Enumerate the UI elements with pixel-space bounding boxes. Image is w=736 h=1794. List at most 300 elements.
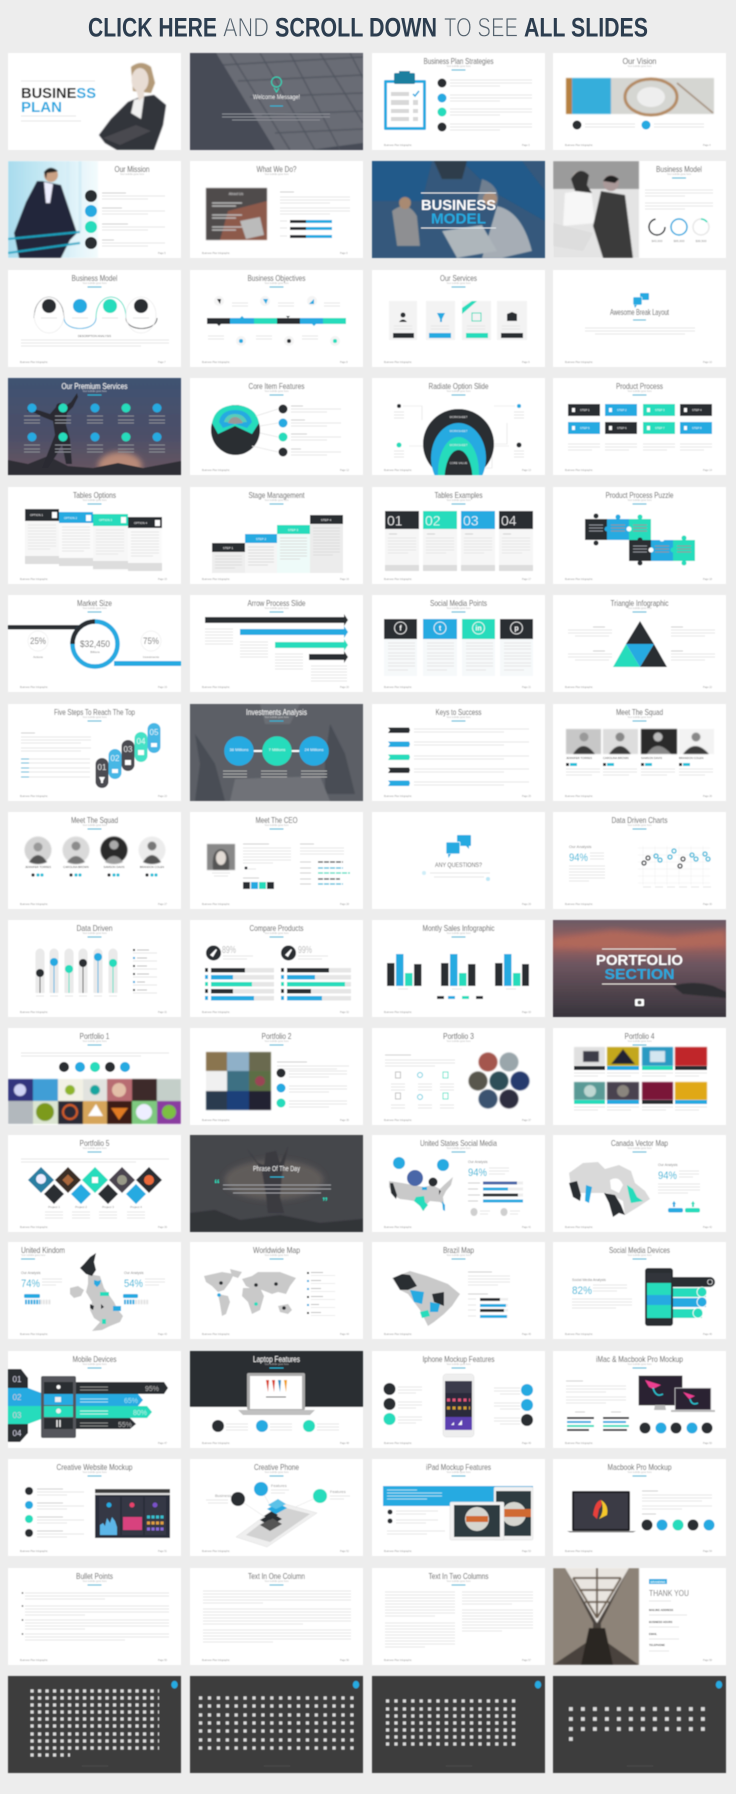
footer: Business Plan Infographic: [20, 1333, 48, 1336]
panel: slide 35 Montly Sales Infographic: [372, 920, 545, 1017]
footer: Business Plan Infographic: [202, 686, 230, 689]
social columns: f: [399, 626, 402, 632]
timeline icons: [214, 296, 340, 346]
footer: Business Plan Infographic: [20, 1226, 48, 1229]
connector lines: [403, 406, 515, 468]
footer: Business Plan Infographic: [384, 795, 412, 798]
stat: 74%: [21, 1271, 41, 1298]
heading: Your subtitle goes here: [264, 173, 289, 176]
badge: [535, 1681, 541, 1688]
feature bullets: [387, 1510, 445, 1534]
stat: 82%: Social Media Analysis: [572, 1278, 606, 1282]
panel: slide 1 cover Business Plan: [8, 53, 181, 151]
process arrows: [205, 614, 348, 663]
heading: Your subtitle goes here: [120, 173, 145, 176]
footer: [565, 469, 713, 472]
footer: [202, 469, 350, 472]
panel: slide 54 Creative Phone: [190, 1459, 363, 1556]
heading: Your subtitle goes here: [627, 716, 652, 719]
footer: Page 7: [158, 361, 166, 364]
footer: Page 10: [703, 361, 713, 364]
stat: 94%: Our Analysis: [468, 1160, 488, 1164]
stat: 25% Actions: [28, 631, 48, 659]
team details: [566, 756, 703, 766]
stat: 54%: Our Analysis: [124, 1271, 144, 1275]
small icons: [396, 1072, 448, 1100]
legend: [307, 1272, 335, 1316]
callout text: Features: [271, 1483, 287, 1488]
heading: Data Driven Charts: [612, 815, 668, 825]
footer: Business Plan Infographic: [20, 1011, 48, 1014]
title: CLICK HERE: [88, 12, 217, 42]
footer: Page 12: [340, 469, 350, 472]
concentric radiate chart: WORKSHEET: [449, 443, 468, 447]
photo: silhouette at sunset: [8, 393, 181, 480]
percent bars: 95%: [145, 1386, 159, 1393]
heading: Creative Phone: [254, 1462, 299, 1472]
heading: Our Mission: [114, 164, 150, 174]
heading: [422, 923, 494, 937]
footer: Page 31: [158, 1011, 168, 1014]
footer: Page 29: [522, 903, 532, 906]
footer: Page 42: [703, 1226, 713, 1229]
icon list: [25, 1487, 84, 1537]
step pills: [96, 723, 160, 788]
heading: Your subtitle goes here: [667, 173, 692, 176]
footer: [565, 686, 713, 689]
stat: 54%: [123, 1271, 144, 1298]
heading: [253, 1245, 300, 1259]
step tiles: STEP 6: [617, 426, 627, 430]
stat: 75% Investments: 75%: [143, 636, 159, 646]
photo grid: [206, 1052, 271, 1110]
footer: Business Plan Infographic: [20, 578, 48, 581]
footer: [20, 1226, 168, 1229]
panel: slide 14 Core Item Features: [190, 378, 363, 475]
footer: Business Plan Infographic: [565, 795, 593, 798]
footer: Business Plan Infographic: [20, 361, 48, 364]
investment circles: [224, 736, 329, 766]
stair steps: STEP 1: [223, 546, 233, 550]
footer: Page 22: [703, 686, 713, 689]
heading: [248, 381, 304, 395]
heading: [246, 707, 307, 721]
footer: Business Plan Infographic: [20, 903, 48, 906]
icons with text: [572, 120, 704, 130]
panel: slide 23 Social Media Points: [372, 595, 545, 692]
project labels: [45, 1205, 145, 1218]
option columns: [25, 509, 162, 571]
isometric phone: [236, 1489, 320, 1547]
percent bars: 65%: [124, 1398, 138, 1405]
step tiles: STEP 5: [580, 426, 590, 430]
step tiles: STEP 1: [580, 408, 590, 412]
bar chart: [387, 954, 529, 986]
footer: [565, 795, 713, 798]
footer: [384, 795, 532, 798]
team details: BRANDON COLEN: [140, 865, 164, 869]
step pills: 02: [111, 754, 120, 763]
heading: Social Media Devices: [609, 1245, 670, 1255]
heading: Arrow Process Slide: [248, 598, 306, 608]
panel: slide 20 Product Process Puzzle: [553, 487, 726, 584]
footer: Business Plan Infographic: [202, 469, 230, 472]
heading: [248, 598, 306, 612]
feature icons: [212, 1420, 339, 1432]
panel: slide 50 Laptop Features: [190, 1351, 363, 1448]
footer: Business Plan Infographic: [384, 578, 412, 581]
heading: Macbook Pro Mockup: [608, 1462, 672, 1472]
heading: Market Size: [77, 598, 112, 608]
footer: [384, 1226, 532, 1229]
heading: Your subtitle goes here: [82, 499, 107, 502]
stat: 54%: 54%: [124, 1278, 143, 1290]
horizontal bars: [468, 1182, 523, 1202]
heading: [21, 1245, 65, 1259]
heading: Product Process Puzzle: [606, 490, 674, 500]
icon grid: [569, 1709, 711, 1739]
heading: Your subtitle goes here: [264, 390, 289, 393]
heading: Your subtitle goes here: [82, 932, 107, 935]
stat: 94%: 94%: [658, 1170, 677, 1182]
footer: Page 9: [522, 361, 530, 364]
panel: slide 62 icons: [190, 1676, 363, 1773]
title: TO SEE: [444, 12, 518, 42]
heading: [80, 1138, 110, 1152]
heading: Canada Vector Map: [611, 1138, 668, 1148]
heading: Your subtitle goes here: [82, 1471, 107, 1474]
ring chart: [8, 622, 181, 666]
left features: [384, 1383, 422, 1425]
panel: slide 6 What We Do: [190, 161, 363, 258]
footer: Page 15: [158, 578, 168, 581]
heading: Your subtitle goes here: [264, 932, 289, 935]
panel: slide 58 Text In One Column: [190, 1568, 363, 1665]
map: world: [204, 1269, 296, 1316]
step tiles: STEP 8: [692, 426, 702, 430]
footer: Page 23: [158, 795, 168, 798]
numbered chevrons: 04: [13, 1429, 22, 1438]
heading: Your subtitle goes here: [264, 716, 289, 719]
heading: Social Media Points: [430, 598, 487, 608]
heading: [443, 1245, 474, 1259]
project labels: Project 3: [102, 1205, 114, 1209]
team details: SAMSON DAVIS: [641, 756, 662, 760]
step tiles: STEP 4: [692, 408, 702, 412]
panel: slide 53 Creative Website Mockup: [8, 1459, 181, 1556]
heading: Our Premium Services: [62, 381, 128, 391]
footer: [565, 1442, 713, 1445]
phone: [41, 1376, 76, 1438]
stat: 75% Investments: Investments: [143, 655, 160, 659]
stair steps: [212, 515, 343, 573]
two text columns: [385, 1592, 533, 1647]
stats: $65,000: [674, 239, 685, 243]
icon grid: [30, 1691, 159, 1755]
stat: 82%: [572, 1278, 606, 1297]
title: SCROLL DOWN: [275, 12, 437, 42]
footer: Business Plan Infographic: [565, 144, 593, 147]
icon: light bulb: [272, 77, 282, 92]
heading: [436, 707, 482, 721]
footer: Business Plan Infographic: [384, 1226, 412, 1229]
team portraits: [24, 836, 166, 864]
heading: [114, 164, 150, 176]
heading: Montly Sales Infographic: [422, 923, 494, 933]
heading: Your subtitle goes here: [82, 1147, 107, 1150]
footer: Page 45: [522, 1333, 532, 1336]
footer: [202, 1333, 350, 1336]
heading: Your subtitle goes here: [627, 390, 652, 393]
heading: [624, 1031, 655, 1045]
footer: [20, 903, 168, 906]
project labels: Project 1: [48, 1205, 60, 1209]
panel: slide 46 Worldwide Map: [190, 1242, 363, 1339]
laptop: [238, 1373, 315, 1415]
heading: Bullet Points: [76, 1571, 113, 1581]
bar chart: [280, 220, 332, 238]
panel: slide 48 Social Media Devices: [553, 1242, 726, 1339]
footer: Page 58: [703, 1659, 713, 1662]
heading: Your subtitle goes here: [627, 1363, 652, 1366]
heading: Your subtitle goes here: [627, 1040, 652, 1043]
stats: $43,000: [652, 239, 663, 243]
heading: Meet The Squad: [616, 707, 663, 717]
heading: [62, 381, 128, 395]
circular photo cluster: [468, 1052, 530, 1108]
stat: 75% Investments: [141, 631, 161, 659]
heading: Your subtitle goes here: [446, 390, 471, 393]
step tiles: STEP 2: [617, 408, 627, 412]
social columns: [384, 619, 533, 676]
percent bars: [74, 1382, 168, 1429]
team details: JENNIFER TORRES: [25, 865, 51, 869]
heading: [422, 1354, 494, 1368]
footer: Page 54: [703, 1550, 713, 1553]
photo: black and white meeting: [553, 161, 639, 258]
heading: Compare Products: [250, 923, 304, 933]
footer: Page 50: [703, 1442, 713, 1445]
option columns: OPTION 1: [30, 513, 43, 517]
panel: slide 21 Market Size: [7, 595, 182, 692]
tile captions: [574, 1066, 707, 1104]
callout text: Business: [215, 1493, 231, 1498]
quote: ”: [322, 1195, 328, 1209]
heading: Tables Examples: [434, 490, 482, 500]
team details: JENNIFER TORRES: [566, 756, 592, 760]
heading: Five Steps To Reach The Top: [54, 707, 135, 717]
panel: slide 2 Welcome Message: [189, 52, 364, 151]
panel: slide 63 icons: [372, 1676, 545, 1773]
footer: Business Plan Infographic: [565, 1333, 593, 1336]
tablets: [450, 1487, 533, 1540]
footer: [20, 361, 166, 364]
panel: slide 64 icons: [553, 1676, 726, 1773]
heading: [248, 273, 306, 287]
icon list: [276, 1068, 286, 1108]
heading: Your subtitle goes here: [627, 1471, 652, 1474]
device mockups: [639, 1376, 715, 1412]
panel: slide 26 Investments Analysis: [189, 703, 364, 802]
quote text: [422, 871, 490, 881]
heading: [434, 490, 482, 504]
team photos: [566, 729, 714, 754]
icon grid: [386, 1701, 518, 1744]
footer: Business Plan Infographic: [20, 1550, 48, 1553]
heading: [428, 381, 489, 395]
heading: iMac & Macbook Pro Mockup: [596, 1354, 683, 1364]
panel: slide 37 Portfolio 1: [7, 1028, 182, 1125]
investment circles: 38 Millions: [230, 747, 248, 752]
feature list: [278, 404, 341, 456]
contact details: MAILING ADDRESS: [649, 1608, 674, 1612]
concentric radiate chart: WORKSHEET: [449, 429, 468, 433]
step tiles: [568, 404, 712, 434]
heading: [54, 707, 135, 721]
heading: [262, 1031, 292, 1045]
text: Awesome Break Layout: Awesome Break Layout: [610, 307, 669, 317]
heading: Text In One Column: [248, 1571, 305, 1581]
map: Brazil: [392, 1271, 460, 1326]
team details: SAMSON DAVIS: [103, 865, 125, 869]
right features: [494, 1384, 533, 1426]
footer: Business Plan Infographic: [384, 1550, 412, 1553]
heading: [73, 490, 116, 504]
text: Portfolio Section: SECTION: [604, 966, 674, 983]
heading: Your subtitle goes here: [446, 499, 471, 502]
footer: Business Plan Infographic: [384, 469, 412, 472]
ring chart: Billions: [90, 650, 100, 654]
number columns: [385, 511, 533, 571]
panel: slide 28 Meet The Squad photos: [553, 704, 726, 801]
stat: 94%: 94%: [468, 1167, 487, 1179]
panel: slide 30 Meet The CEO: [190, 812, 363, 909]
heading: [609, 1245, 670, 1259]
photo: About Us: [206, 188, 267, 240]
percent bars: 80%: [133, 1410, 147, 1417]
footer: [565, 361, 713, 364]
text: Business Model: MODEL: [431, 210, 486, 228]
project labels: Project 2: [75, 1205, 87, 1209]
heading: Your subtitle goes here: [82, 607, 107, 610]
heading: Your subtitle goes here: [264, 1254, 289, 1257]
footer: Page 46: [703, 1333, 713, 1336]
heading: [440, 273, 477, 287]
footer: Page 32: [340, 1011, 350, 1014]
heading: [254, 1462, 299, 1476]
panel: slide 49 Mobile Devices: [8, 1351, 181, 1448]
heading: Business Objectives: [248, 273, 306, 283]
numbered chevrons: 01: [13, 1375, 22, 1384]
gender stats: [470, 1208, 520, 1216]
heading: Business Model: [72, 273, 118, 283]
footer: Page 19: [158, 686, 168, 689]
panel: slide 38 Portfolio 2: [190, 1028, 363, 1125]
panel: slide 52 iMac and Macbook Pro Mockup: [553, 1351, 726, 1448]
heading: Your subtitle goes here: [82, 390, 107, 393]
photo: sunset sea: [553, 930, 726, 998]
timeline ribbon: [207, 316, 346, 326]
footer: Page 39: [158, 1226, 168, 1229]
tag: branding: BRANDING: [650, 1580, 666, 1584]
panel: slide 15 Radiate Option Slide: [372, 378, 545, 476]
footer: Business Plan Infographic: [384, 144, 412, 147]
panel: slide 7 Business Model section: [371, 160, 546, 259]
icon row: [640, 1422, 712, 1434]
footer: [384, 469, 532, 472]
percent bars: 55%: [118, 1422, 132, 1429]
heading: Portfolio 3: [443, 1031, 474, 1041]
heading: Triangle Infographic: [610, 598, 668, 608]
footer: Business Plan Infographic: [565, 469, 593, 472]
stat: 94%: [658, 1163, 678, 1182]
icon grid: [199, 1698, 354, 1748]
heading: Product Process: [616, 381, 663, 391]
heading: [248, 1571, 305, 1585]
footer: [384, 1659, 532, 1662]
footer: [384, 578, 532, 581]
footer: Page 17: [522, 578, 532, 581]
footer: [202, 903, 350, 906]
footer: Business Plan Infographic: [384, 1442, 412, 1445]
footer: Business Plan Infographic: [20, 795, 48, 798]
heading: Business Plan: PLAN: [21, 99, 62, 116]
heading: Your subtitle goes here: [264, 282, 289, 285]
heading: Business Plan Strategies: [424, 56, 494, 66]
footer: [384, 686, 532, 689]
number columns: 02: [425, 512, 441, 528]
footer: Page 57: [522, 1659, 532, 1662]
panel: slide 8 Business Model photo: [552, 160, 726, 259]
footer: Page 8: [340, 361, 348, 364]
footer: [20, 1011, 168, 1014]
comparison bars: [205, 968, 351, 1000]
heading: Your subtitle goes here: [446, 1471, 471, 1474]
heading: [256, 164, 297, 176]
heading: Mobile Devices: [72, 1354, 116, 1364]
footer: Page 33: [522, 1011, 532, 1014]
text: Phrase Of The Day: Phrase Of The Day: [253, 1166, 300, 1173]
heading: Your subtitle goes here: [627, 65, 652, 68]
footer: Business Plan Infographic: [565, 1550, 593, 1553]
panel: slide 33 Data Driven: [8, 920, 181, 1017]
footer: [202, 1442, 350, 1445]
text: Any Questions: ANY QUESTIONS?: [435, 862, 482, 869]
footer: [384, 1011, 532, 1014]
text block: [468, 1272, 510, 1294]
icon list: [85, 190, 165, 249]
photo: meeting room: [195, 704, 355, 801]
heading: What We Do?: [256, 164, 297, 174]
heading: Your subtitle goes here: [82, 1363, 107, 1366]
map: Canada: [569, 1162, 650, 1217]
heading: Our Services: [440, 273, 477, 283]
panel: slide 60 Thank You: [553, 1568, 726, 1665]
icon: chat bubbles: [633, 293, 649, 308]
panel: slide 19 Tables Examples: [372, 487, 545, 584]
photo: skylight corridor: [553, 1568, 639, 1665]
side icons: [394, 404, 524, 457]
badge: [716, 1681, 722, 1688]
social icons: [243, 866, 274, 889]
heading: Data Driven: [76, 923, 113, 933]
footer: [384, 1333, 532, 1336]
pictogram: [124, 1300, 135, 1304]
photo: CEO portrait: [207, 844, 235, 870]
footer: [20, 686, 168, 689]
quote: [214, 1177, 331, 1209]
phone with bars: [645, 1268, 715, 1326]
